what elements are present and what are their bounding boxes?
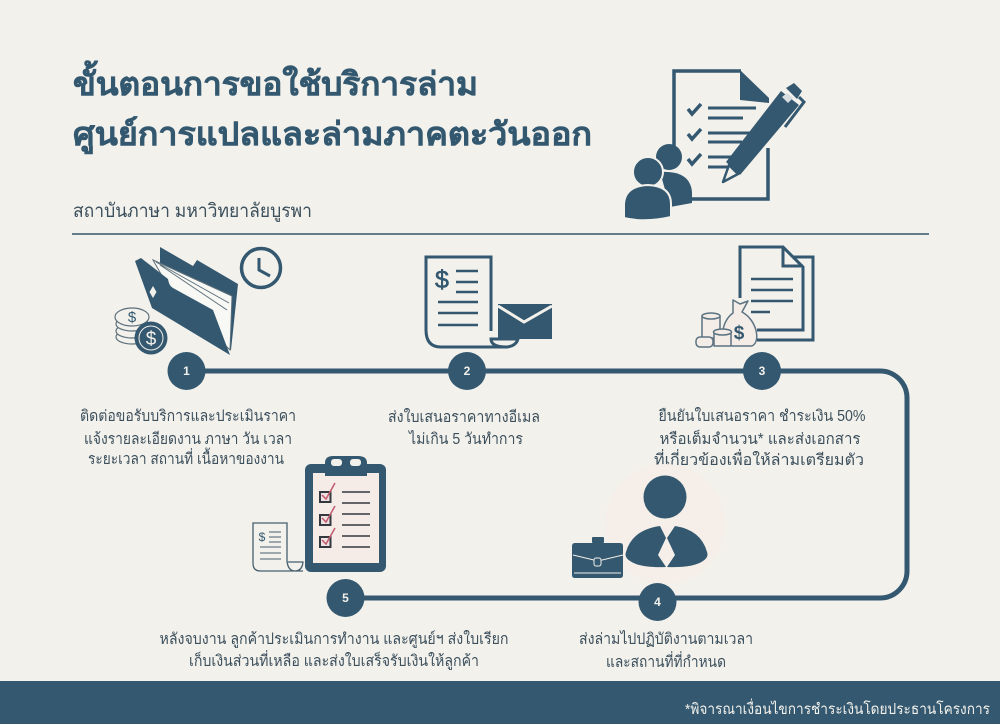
icon: document with pen and people: [624, 70, 804, 220]
title: [73, 60, 592, 155]
number 5: [326, 579, 364, 617]
text: step 2: ไม่เกิน 5 วันทำการ: [407, 430, 523, 448]
icon: clock: [242, 248, 280, 288]
step 5: [160, 456, 508, 671]
text: step 2: ส่งใบเสนอราคาทางอีเมล: [388, 408, 540, 426]
footer band: [0, 681, 1000, 724]
number 1: 1: [183, 364, 190, 378]
text: step 2: [388, 408, 540, 448]
icon: receipt: [253, 523, 303, 571]
step 1: [80, 247, 296, 468]
text: step 4: ส่งล่ามไปปฏิบัติงานตามเวลา: [579, 630, 753, 648]
icon: coins: [115, 308, 168, 354]
step 2: [388, 257, 552, 448]
text: step 3: [654, 407, 866, 469]
number 3: 3: [759, 364, 766, 378]
text: step 3: หรือเต็มจำนวน* และส่งเอกสาร: [660, 429, 860, 448]
text: step 5: เก็บเงินส่วนที่เหลือ และส่งใบเสร็จรับเงินให้ลูกค้า: [189, 650, 479, 671]
number 1: [168, 352, 206, 390]
title: ขั้นตอนการขอใช้บริการล่าม: [73, 60, 478, 102]
text: step 4: [579, 630, 753, 671]
text: step 1: ระยะเวลา สถานที่ เนื้อหาของงาน: [88, 447, 284, 468]
text: step 1: [80, 408, 296, 468]
icon: folder: [135, 247, 238, 355]
icon: coins: $: [128, 309, 137, 326]
icon: interpreter with briefcase: [572, 464, 725, 584]
step 4: [572, 464, 753, 671]
icon: clipboard: [305, 456, 386, 572]
text: step 3: ยืนยันใบเสนอราคา ชำระเงิน 50%: [658, 407, 866, 425]
number 4: 4: [654, 595, 661, 609]
text: step 5: หลังจบงาน ลูกค้าประเมินการทำงาน และศูนย์ฯ ส่งใบเรียก: [160, 630, 508, 649]
number 5: 5: [342, 591, 349, 605]
number 4: [638, 583, 676, 621]
number 3: [743, 352, 781, 390]
icon: quotation and envelope: $: [435, 266, 449, 294]
text: step 1: ติดต่อขอรับบริการและประเมินราคา: [80, 408, 296, 425]
step 3: [654, 247, 866, 469]
process line: [186, 371, 907, 598]
icon: documents and money: [696, 247, 813, 347]
text: step 4: และสถานที่ที่กำหนด: [606, 651, 726, 671]
icon: documents and money: $: [734, 323, 745, 344]
text: step 5: [160, 630, 508, 671]
icon: coins: $: [146, 329, 157, 350]
number 2: [448, 352, 486, 390]
text: step 3: ที่เกี่ยวข้องเพื่อให้ล่ามเตรียมตัว: [654, 449, 864, 469]
icon: receipt: $: [259, 530, 266, 544]
number 2: 2: [464, 364, 471, 378]
title: ศูนย์การแปลและล่ามภาคตะวันออก: [73, 116, 592, 155]
text: step 1: แจ้งรายละเอียดงาน ภาษา วัน เวลา: [84, 431, 292, 448]
icon: quotation and envelope: [426, 257, 552, 347]
subtitle: สถาบันภาษา มหาวิทยาลัยบูรพา: [73, 201, 312, 222]
